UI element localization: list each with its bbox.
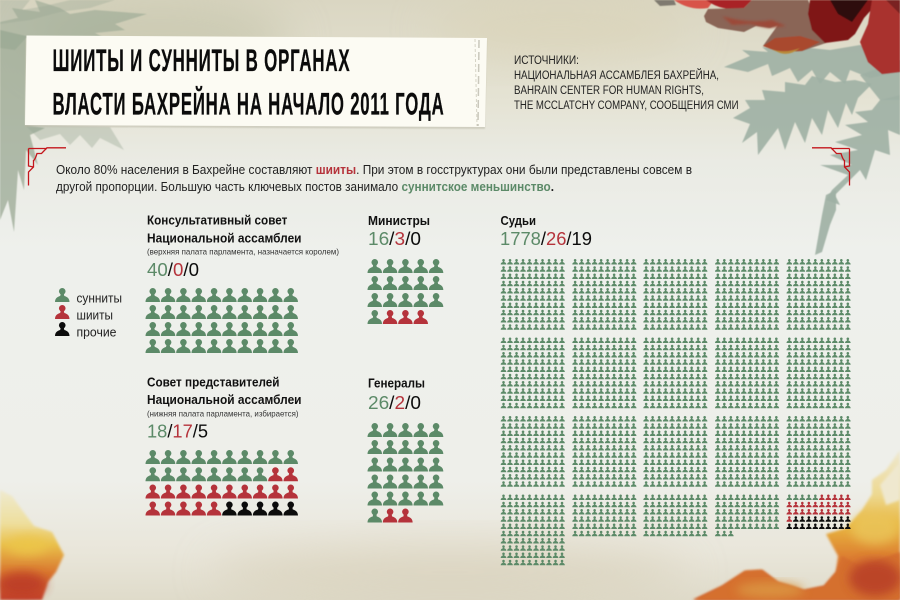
intro text: Около 80% населения в Бахрейне составляют шииты. При этом в госструктурах они были представлены совсем в (56, 162, 692, 177)
heading: Генералы (368, 376, 425, 390)
panel: judges (500, 213, 851, 565)
title (52, 42, 445, 122)
note: (верхняя палата парламента, назначается королем) (147, 246, 339, 256)
corner ornament right (812, 148, 850, 186)
title: ВЛАСТИ БАХРЕЙНА НА НАЧАЛО 2011 ГОДА (52, 86, 445, 122)
sources: НАЦИОНАЛЬНАЯ АССАМБЛЕЯ БАХРЕЙНА, (514, 69, 719, 82)
heading line 2: Национальной ассамблеи (147, 392, 302, 407)
legend (55, 288, 122, 340)
count: 26/2/0 (368, 393, 421, 413)
icon grid: other block (786, 516, 851, 529)
intro text (56, 162, 692, 194)
icon grid (146, 450, 298, 516)
sources: BAHRAIN CENTER FOR HUMAN RIGHTS, (514, 85, 704, 97)
icon grid (368, 259, 443, 324)
sources: THE MCCLATCHY COMPANY, СООБЩЕНИЯ СМИ (514, 100, 738, 112)
heading: Консультативный совет (147, 212, 287, 227)
sources: ИСТОЧНИКИ: (514, 55, 579, 67)
panel: council of representatives (146, 374, 302, 516)
title: ШИИТЫ И СУННИТЫ В ОРГАНАХ (52, 42, 350, 78)
legend item: shia: шииты (76, 308, 113, 322)
heading: Судьи (500, 213, 536, 228)
legend item: sunni: сунниты (76, 291, 122, 306)
sources (514, 55, 738, 112)
count: 18/17/5 (147, 422, 208, 442)
icon grid (146, 288, 298, 353)
heading: Совет представителей (147, 374, 280, 390)
red flowers top right (654, 0, 900, 74)
icon grid: sunni blocks (501, 259, 851, 565)
icon grid: shia block (786, 494, 851, 522)
intro text: другой пропорции. Большую часть ключевых постов занимало суннитское меньшинство. (56, 179, 554, 194)
explosion bottom left (0, 490, 64, 600)
title paper strip (25, 36, 487, 129)
heading line 2: Национальной ассамблеи (147, 230, 302, 245)
palm fronds: top right (724, 45, 900, 255)
count: 1778/26/19 (500, 229, 592, 249)
corner ornament left (28, 148, 66, 186)
panel: generals (368, 376, 443, 522)
explosion bottom right (693, 450, 900, 600)
palm fronds: top left (0, 0, 147, 232)
count: 40/0/0 (147, 260, 199, 280)
legend item: other: прочие (76, 325, 116, 340)
panel: consultative council (146, 212, 339, 353)
heading: Министры (368, 213, 430, 228)
panel: ministers (368, 213, 443, 324)
count: 16/3/0 (368, 229, 421, 249)
icon grid (368, 423, 443, 522)
note: (нижняя палата парламента, избирается) (147, 408, 299, 418)
